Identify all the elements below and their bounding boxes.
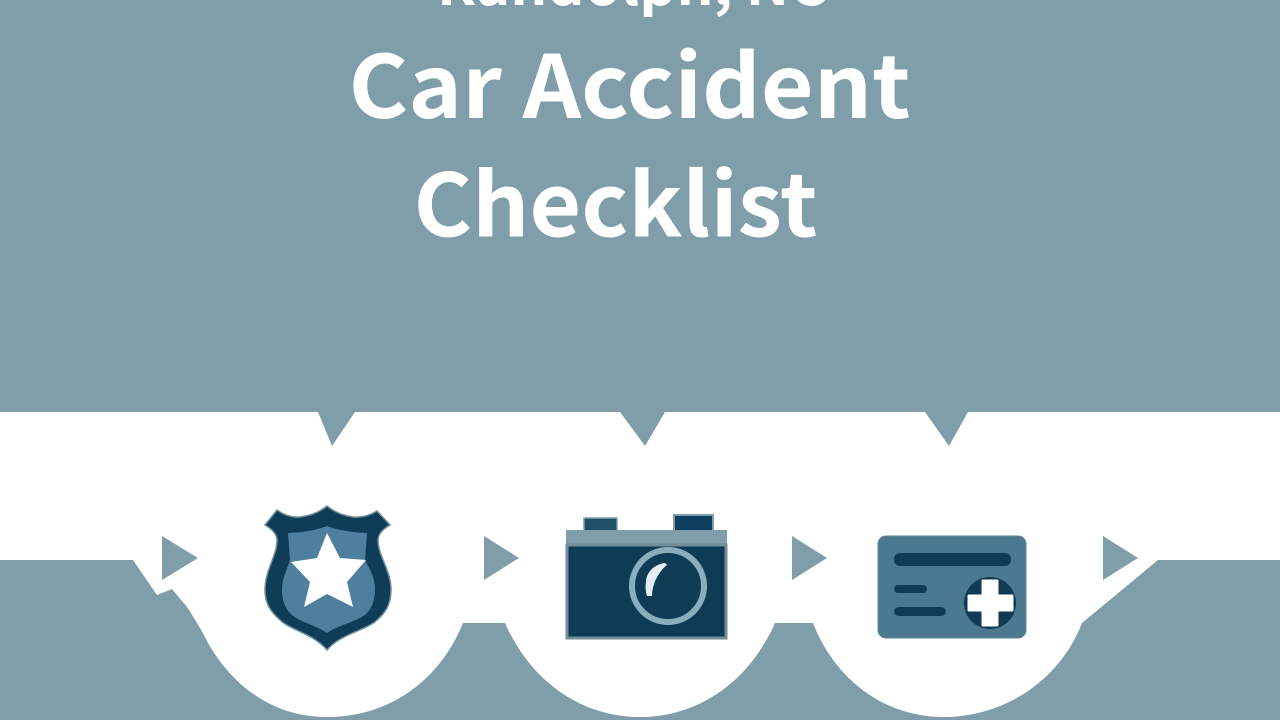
title: Car Accident Checklist: Checklist [414,136,818,262]
icon: police badge [265,506,391,650]
white scalloped band with notches [0,412,1280,717]
icon: insurance card [878,536,1026,638]
title: Car Accident Checklist: Car Accident [348,18,910,144]
title: Car Accident Checklist [348,18,910,262]
icon: camera [566,515,727,638]
arrow markers [162,536,1138,580]
